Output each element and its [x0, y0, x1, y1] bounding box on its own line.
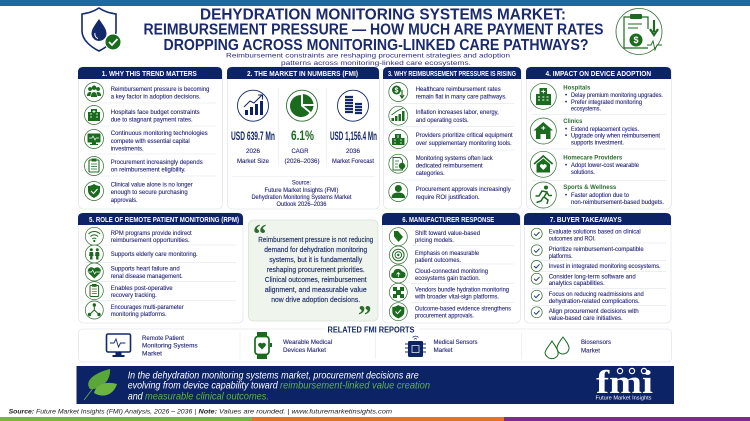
item: readmissions	[531, 290, 644, 305]
source line: Values are rounded. | www.futuremarketinsights.com	[219, 408, 392, 415]
item: ROI justification: require ROI justification.	[416, 194, 480, 201]
item: readmissions: dehydration-related complications.	[549, 298, 640, 305]
item: value-based care	[531, 307, 639, 322]
item: readmissions: Focus on reducing readmissions and	[549, 291, 644, 298]
item: indirect opportunities	[85, 227, 192, 245]
item: hospitals: ecosystems.	[571, 107, 601, 113]
item: procurement eligibility: Procurement increasingly depends	[111, 159, 203, 166]
icon: pie chart	[286, 90, 318, 121]
item: vendor bundles: Vendors bundle hydration monitoring	[415, 286, 509, 294]
item: hospitals: Hospitals	[563, 84, 591, 92]
top bar	[0, 0, 750, 6]
item: heart failure: Supports heart failure and	[111, 266, 180, 272]
heading: panel 5: 5. ROLE OF REMOTE PATIENT MONITORING (RPM)	[89, 215, 239, 224]
item: measurable outcomes: Emphasis on measurable	[415, 250, 479, 257]
item: inflation: Inflation increases labor, energy,	[416, 109, 499, 116]
item: flat rates: $	[395, 88, 399, 94]
icon: coin stacks	[338, 90, 368, 121]
source line	[9, 408, 392, 415]
banner text	[128, 370, 430, 402]
item: indirect opportunities: RPM programs provide indirect	[111, 230, 192, 237]
source note	[252, 180, 352, 208]
icon: clipboard with falling payment: $	[633, 35, 639, 45]
source line: Future Market Insights (FMI) Analysis, 2026 – 2036 |	[36, 408, 196, 415]
stat: 2026 market size	[231, 129, 275, 165]
heading: related reports: RELATED FMI REPORTS	[328, 326, 415, 334]
item: capital investments	[84, 130, 208, 152]
item: flat rates: Healthcare reimbursement rates	[416, 86, 501, 93]
source note: Dehydration Monitoring Systems Market	[252, 195, 352, 201]
item: procurement eligibility	[84, 156, 203, 176]
quote text: now drive adoption decisions.	[271, 295, 360, 304]
source line: Note:	[198, 408, 217, 415]
item: elderly care	[85, 245, 198, 263]
item: capital investments: investments.	[111, 146, 144, 152]
source note: Future Market Insights (FMI)	[264, 188, 338, 194]
item: integrated ecosystems: Invest in integrated monitoring ecosystems.	[549, 263, 661, 270]
stat: CAGR: CAGR	[292, 149, 309, 155]
item: clinics	[530, 118, 660, 147]
panel: related reports	[78, 325, 672, 362]
source note: Outlook 2026–2036	[276, 202, 327, 208]
item: measurable outcomes	[389, 246, 479, 264]
report: remote patient monitoring: Market	[142, 351, 162, 357]
item: value-based pricing: pricing models.	[415, 237, 454, 244]
item: critical equipment: over supplementary monitoring tools.	[416, 140, 512, 147]
quote text: Clinical outcomes, reimbursement	[265, 275, 367, 284]
icon: leaves	[84, 369, 117, 400]
item: reimbursement categories: Monitoring systems often lack	[416, 155, 493, 162]
item: post-operative tracking	[85, 282, 173, 300]
item: inflation: and operating costs.	[416, 117, 469, 124]
item: sports and wellness: non-reimbursement-based budgets.	[571, 200, 664, 206]
item: value-based care: value-based care initiatives.	[549, 315, 623, 322]
stat: 2036 forecast: USD 1,156.4 Mn	[330, 129, 377, 143]
item: clinics: •	[565, 127, 567, 133]
report: wearable medical devices: Devices Market	[283, 348, 326, 354]
icon: opening quote: “	[253, 219, 266, 249]
banner	[76, 365, 674, 404]
report: remote patient monitoring: Remote Patient	[142, 336, 184, 342]
subtitle: patterns across monitoring-linked care ecosystems.	[281, 60, 471, 67]
report: wearable medical devices	[255, 332, 332, 359]
heading: panel 6: 6. MANUFACTURER RESPONSE	[402, 215, 494, 224]
bottom colour bar	[0, 417, 750, 421]
item: ROI justification: Procurement approvals increasingly	[416, 186, 511, 193]
banner text: reimbursement-linked value creation	[280, 380, 430, 392]
item: compatible platforms	[531, 245, 644, 260]
panel: the market in numbers	[227, 67, 380, 209]
item: hospitals: •	[565, 93, 567, 99]
item: measurable outcomes: patient outcomes.	[415, 257, 461, 264]
report: biosensors: Market	[581, 348, 600, 354]
heading: panel 2: 2. THE MARKET IN NUMBERS (FMI)	[247, 69, 358, 78]
item: homecare providers: Adopt lower-cost wearable	[571, 163, 640, 169]
item: software and analytics: Consider long-term software and	[549, 274, 636, 280]
item: cloud ecosystems: ecosystems gain traction.	[415, 275, 480, 282]
item: sports and wellness: •	[565, 193, 567, 199]
item: indirect opportunities: reimbursement opportunities.	[111, 237, 190, 244]
item: value-based pricing: Shift toward value-based	[415, 230, 480, 237]
item: sports and wellness: Faster adoption due to	[571, 193, 630, 199]
item: key factor: a key factor in adoption decisions.	[111, 94, 201, 100]
item: homecare providers: •	[565, 163, 567, 169]
item: outcome-based evidence: procurement approvals.	[415, 312, 474, 320]
report: remote patient monitoring	[106, 334, 198, 357]
report: biosensors	[545, 337, 611, 359]
report: wearable medical devices: Wearable Medical	[283, 340, 332, 346]
title: DEHYDRATION MONITORING SYSTEMS MARKET:	[200, 6, 566, 23]
item: critical equipment	[389, 130, 513, 148]
stat: 2036 forecast	[330, 129, 377, 165]
item: clinics: •	[565, 134, 567, 140]
item: software and analytics	[531, 273, 636, 287]
subtitle	[226, 52, 510, 67]
heading: panel 1: 1. WHY THIS TREND MATTERS	[102, 69, 197, 78]
item: elderly care: Supports elderly care monitoring.	[111, 251, 198, 258]
item: flat rates: remain flat in many care pathways.	[416, 94, 507, 100]
item: heart failure: renal disease management.	[111, 273, 183, 280]
item: post-operative tracking: Enables post-operative	[111, 285, 173, 292]
quote text: demand for dehydration monitoring	[264, 245, 367, 254]
panel: quote	[248, 219, 378, 330]
report: medical sensors: Medical Sensors	[434, 340, 478, 346]
item: evaluate solutions	[531, 228, 641, 242]
item: key factor: Reimbursement pressure is becoming	[111, 86, 210, 93]
panel: manufacturer response	[382, 213, 520, 323]
report: medical sensors: Market	[434, 348, 453, 354]
stat: 2036 forecast: 2036	[346, 149, 361, 155]
item: capital investments: Continuous monitoring technologies	[111, 130, 208, 137]
panel: role of remote patient monitoring	[78, 213, 243, 323]
heading: panel 3: 3. WHY REIMBURSEMENT PRESSURE IS RISING	[388, 69, 516, 78]
item: homecare providers	[530, 151, 640, 177]
item: multi-parameter platforms: monitoring platforms.	[111, 311, 167, 318]
item: cloud ecosystems: Cloud-connected monitoring	[415, 268, 488, 275]
banner text: and	[128, 392, 143, 402]
item: capital investments: compete with essential capital	[111, 138, 190, 145]
panel: buyer takeaways	[524, 213, 671, 323]
item: post-operative tracking: recovery tracking.	[111, 292, 157, 299]
item: multi-parameter platforms	[85, 301, 184, 319]
report: biosensors: Biosensors	[581, 340, 611, 346]
icon: growth chart	[238, 90, 268, 121]
quote text: reshaping procurement priorities.	[267, 265, 365, 274]
item: vendor bundles: with broader vital-sign platforms.	[414, 294, 499, 300]
stat: 2026 market size: USD 639.7 Mn	[231, 129, 275, 143]
item: key factor	[84, 82, 210, 102]
item: reimbursement categories: dedicated reimbursement	[416, 162, 483, 170]
item: heart failure	[85, 263, 183, 281]
item: evaluate solutions: outcomes and ROI.	[549, 236, 596, 242]
item: value-based care: Align procurement decisions with	[549, 308, 639, 315]
item: ROI justification	[389, 182, 511, 202]
item: hospitals: Prefer integrated monitoring	[571, 100, 642, 106]
title	[144, 6, 604, 54]
icon: clipboard with falling payment	[616, 8, 662, 54]
stat: 2036 forecast: Market Forecast	[332, 159, 374, 165]
logo: fmi: fmi	[596, 365, 653, 401]
heading: panel 7: 7. BUYER TAKEAWAYS	[550, 215, 622, 224]
icon: closing quote: ”	[358, 300, 372, 330]
title: DROPPING ACROSS MONITORING-LINKED CARE PATHWAYS?	[164, 37, 588, 54]
item: hospitals: •	[565, 100, 567, 106]
subtitle: Reimbursement constraints are reshaping procurement strategies and adoption	[226, 52, 510, 60]
item: clinical value: Clinical value alone is no longer	[111, 182, 193, 188]
item: clinics: Upgrade only when reimbursement	[571, 134, 660, 140]
item: cloud ecosystems	[389, 265, 488, 283]
item: critical equipment: Providers prioritize critical equipment	[416, 132, 513, 139]
banner text: evolving from device capability toward	[128, 380, 278, 392]
panel: why reimbursement pressure is rising	[383, 67, 522, 209]
item: clinical value	[84, 182, 193, 204]
item: vendor bundles	[389, 283, 509, 301]
title: REIMBURSEMENT PRESSURE — HOW MUCH ARE PAYMENT RATES	[144, 22, 604, 39]
report: remote patient monitoring: Monitoring Systems	[142, 344, 198, 350]
item: clinics: Extend replacement cycles.	[571, 127, 639, 133]
banner text: measurable clinical outcomes.	[145, 392, 269, 402]
item: sports and wellness: Sports & Wellness	[563, 184, 617, 191]
item: outcome-based evidence	[389, 303, 512, 321]
item: homecare providers: Homecare Providers	[563, 154, 623, 162]
item: sports and wellness	[530, 182, 664, 208]
icon: shield with water drop	[82, 8, 121, 51]
item: multi-parameter platforms: Encourages multi-parameter	[111, 304, 184, 311]
item: compatible platforms: platforms.	[549, 253, 573, 260]
item: homecare providers: solutions.	[571, 170, 595, 176]
panel: impact on device adoption	[526, 67, 672, 209]
source line: Source:	[9, 408, 34, 415]
quote text: alignment, and measurable value	[265, 285, 367, 294]
panel: why this trend matters	[78, 67, 222, 209]
item: flat rates	[389, 82, 507, 102]
item: hospitals	[530, 83, 663, 113]
item: procurement eligibility: on reimbursement eligibility.	[111, 166, 186, 174]
banner text: In the dehydration monitoring systems market, procurement decisions are	[128, 370, 419, 382]
item: inflation	[389, 106, 499, 125]
item: hospital budgets: Hospitals face budget constraints	[111, 109, 200, 116]
item: clinical value: enough to secure purchasing	[111, 189, 188, 196]
stat: CAGR	[284, 127, 320, 165]
item: evaluate solutions: Evaluate solutions based on clinical	[549, 228, 641, 236]
item: compatible platforms: Prioritize reimbursement-compatible	[549, 246, 644, 253]
quote text	[258, 235, 373, 304]
item: software and analytics: analytics capabilities.	[549, 280, 605, 287]
quote text: systems, but it is fundamentally	[269, 255, 363, 264]
heading: panel 4: 4. IMPACT ON DEVICE ADOPTION	[546, 69, 651, 78]
item: hospital budgets	[84, 106, 200, 124]
item: value-based pricing	[389, 228, 480, 246]
stat: 2026 market size: Market Size	[237, 159, 270, 165]
item: clinical value: approvals.	[111, 197, 138, 204]
item: clinics: Clinics	[563, 118, 583, 125]
quote text: Reimbursement pressure is not reducing	[258, 235, 373, 244]
item: integrated ecosystems	[531, 260, 661, 272]
stat: CAGR: (2026–2036)	[284, 159, 320, 165]
stat: CAGR: 6.1%	[291, 127, 314, 143]
logo: fmi: Future Market Insights	[596, 396, 652, 402]
item: hospital budgets: due to stagnant payment rates.	[111, 116, 193, 124]
item: hospitals: Delay premium monitoring upgrades.	[571, 93, 663, 99]
item: outcome-based evidence: Outcome-based evidence strengthens	[415, 306, 512, 312]
stat: 2026 market size: 2026	[246, 149, 261, 155]
item: reimbursement categories	[389, 154, 493, 177]
item: reimbursement categories: categories.	[416, 170, 445, 177]
report: medical sensors	[405, 336, 478, 357]
source note: Source:	[292, 180, 311, 186]
item: clinics: supports investment.	[571, 141, 624, 147]
